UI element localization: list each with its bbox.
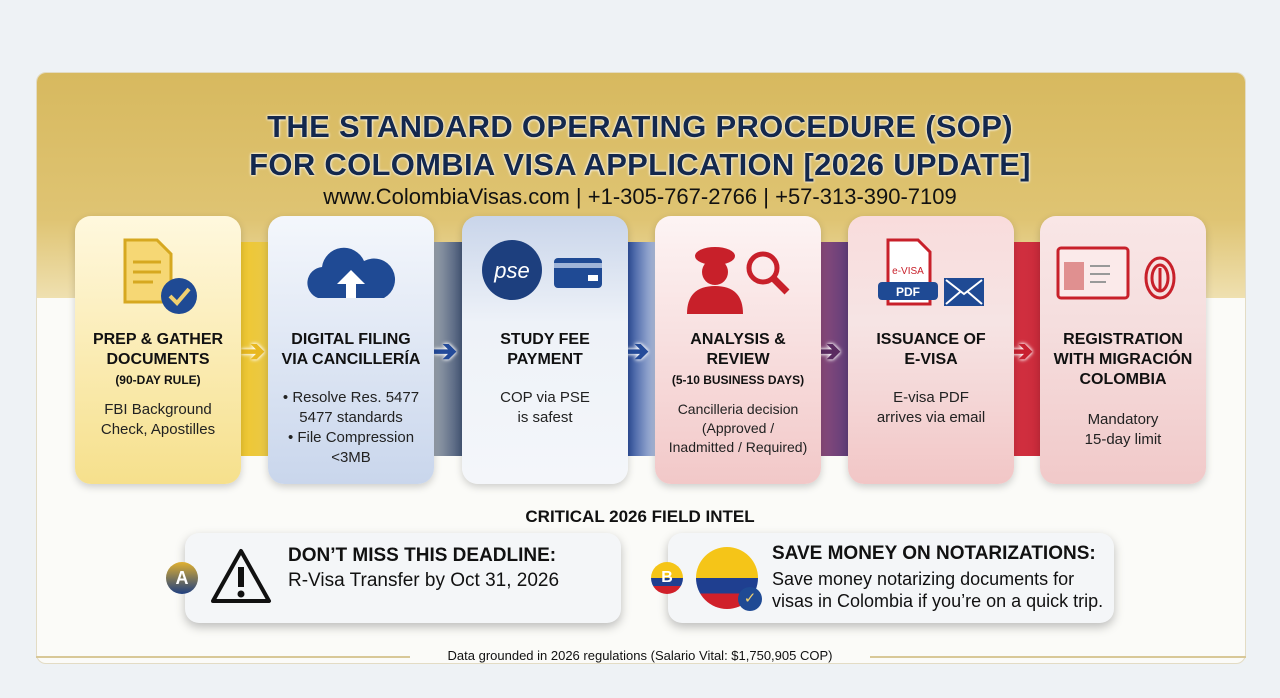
text: ➔ <box>432 335 457 368</box>
callout A <box>185 533 621 623</box>
card 6: registration: Mandatory <box>1088 411 1158 428</box>
icon: id card fingerprint <box>1056 246 1176 300</box>
card 5: e-visa: arrives via email <box>877 409 985 426</box>
section heading: CRITICAL 2026 FIELD INTEL <box>525 507 755 526</box>
title: THE STANDARD OPERATING PROCEDURE (SOP) <box>267 109 1013 144</box>
text: ➔ <box>1008 335 1033 368</box>
title <box>248 109 1031 184</box>
icon: pse and card <box>482 240 602 300</box>
icon: warning <box>211 548 272 603</box>
card 5: e-visa: ISSUANCE OF <box>876 331 986 348</box>
icon: pdf and mail: PDF <box>896 285 920 299</box>
card 5: e-visa: E-VISA <box>904 351 958 368</box>
icon: cloud upload <box>307 248 396 298</box>
card 3: fee: is safest <box>517 409 573 426</box>
badge A: A <box>176 568 188 588</box>
text: ➔ <box>816 335 841 368</box>
card 2: digital filing: 5477 standards <box>299 409 403 426</box>
badge B: B <box>661 569 673 586</box>
card 6: registration: REGISTRATION <box>1063 331 1183 348</box>
callout B: visas in Colombia if you’re on a quick trip. <box>772 591 1103 611</box>
card 1: prep: (90-DAY RULE) <box>115 373 201 387</box>
card 3: fee: STUDY FEE <box>500 331 590 348</box>
card 6: registration: COLOMBIA <box>1079 371 1167 388</box>
card 3: fee: COP via PSE <box>500 389 590 406</box>
card 2: digital filing: <3MB <box>331 449 371 466</box>
icon: officer magnifier <box>687 247 790 314</box>
card 5: e-visa: E-visa PDF <box>893 389 969 406</box>
card 3: fee: PAYMENT <box>507 351 583 368</box>
card 4: analysis: Cancilleria decision <box>678 401 798 417</box>
card 6: registration <box>1040 216 1206 484</box>
card 1: prep: DOCUMENTS <box>106 351 210 368</box>
card 4: analysis: (5-10 BUSINESS DAYS) <box>672 373 804 387</box>
icon: colombia flag <box>696 547 758 609</box>
card 5: e-visa <box>848 216 1014 484</box>
card 6: registration: WITH MIGRACIÓN <box>1054 351 1192 368</box>
badge A <box>166 562 198 594</box>
callout A: R-Visa Transfer by Oct 31, 2026 <box>288 570 559 591</box>
icon: pdf and mail <box>878 238 984 306</box>
card 2: digital filing: VIA CANCILLERÍA <box>282 351 420 368</box>
card 1: prep: Check, Apostilles <box>101 421 215 438</box>
callout B: ✓ <box>744 590 756 607</box>
card 1: prep: FBI Background <box>104 401 212 418</box>
card 4: analysis: (Approved / <box>702 420 774 436</box>
card 1: prep <box>75 216 241 484</box>
icon: document check <box>124 238 197 314</box>
callout B: SAVE MONEY ON NOTARIZATIONS: <box>772 543 1096 564</box>
footer note: Data grounded in 2026 regulations (Salario Vital: $1,750,905 COP) <box>448 648 832 663</box>
card 3: fee <box>462 216 628 484</box>
card 2: digital filing <box>268 216 434 484</box>
icon: pdf and mail: e-VISA <box>892 266 924 277</box>
card 6: registration: 15-day limit <box>1085 431 1161 448</box>
card 4: analysis <box>655 216 821 484</box>
title: FOR COLOMBIA VISA APPLICATION [2026 UPDATE] <box>249 147 1031 182</box>
icon: pse and card: pse <box>493 258 530 283</box>
callout B: Save money notarizing documents for <box>772 569 1074 589</box>
connector bands <box>240 242 272 456</box>
footer line <box>36 656 1246 658</box>
card 2: digital filing: • Resolve Res. 5477 <box>283 389 419 406</box>
text: ➔ <box>624 335 649 368</box>
callout A: DON’T MISS THIS DEADLINE: <box>288 545 556 566</box>
card 2: digital filing: DIGITAL FILING <box>291 331 411 348</box>
card 4: analysis: Inadmitted / Required) <box>669 439 807 455</box>
card 4: analysis: ANALYSIS & <box>690 331 786 348</box>
card 1: prep: PREP & GATHER <box>93 331 223 348</box>
card 4: analysis: REVIEW <box>706 351 770 368</box>
badge B <box>651 562 683 594</box>
arrows: ➔ <box>240 335 265 368</box>
card 2: digital filing: • File Compression <box>288 429 414 446</box>
callout B <box>668 533 1114 623</box>
contact line: www.ColombiaVisas.com | +1-305-767-2766 | +57-313-390-7109 <box>323 184 957 209</box>
